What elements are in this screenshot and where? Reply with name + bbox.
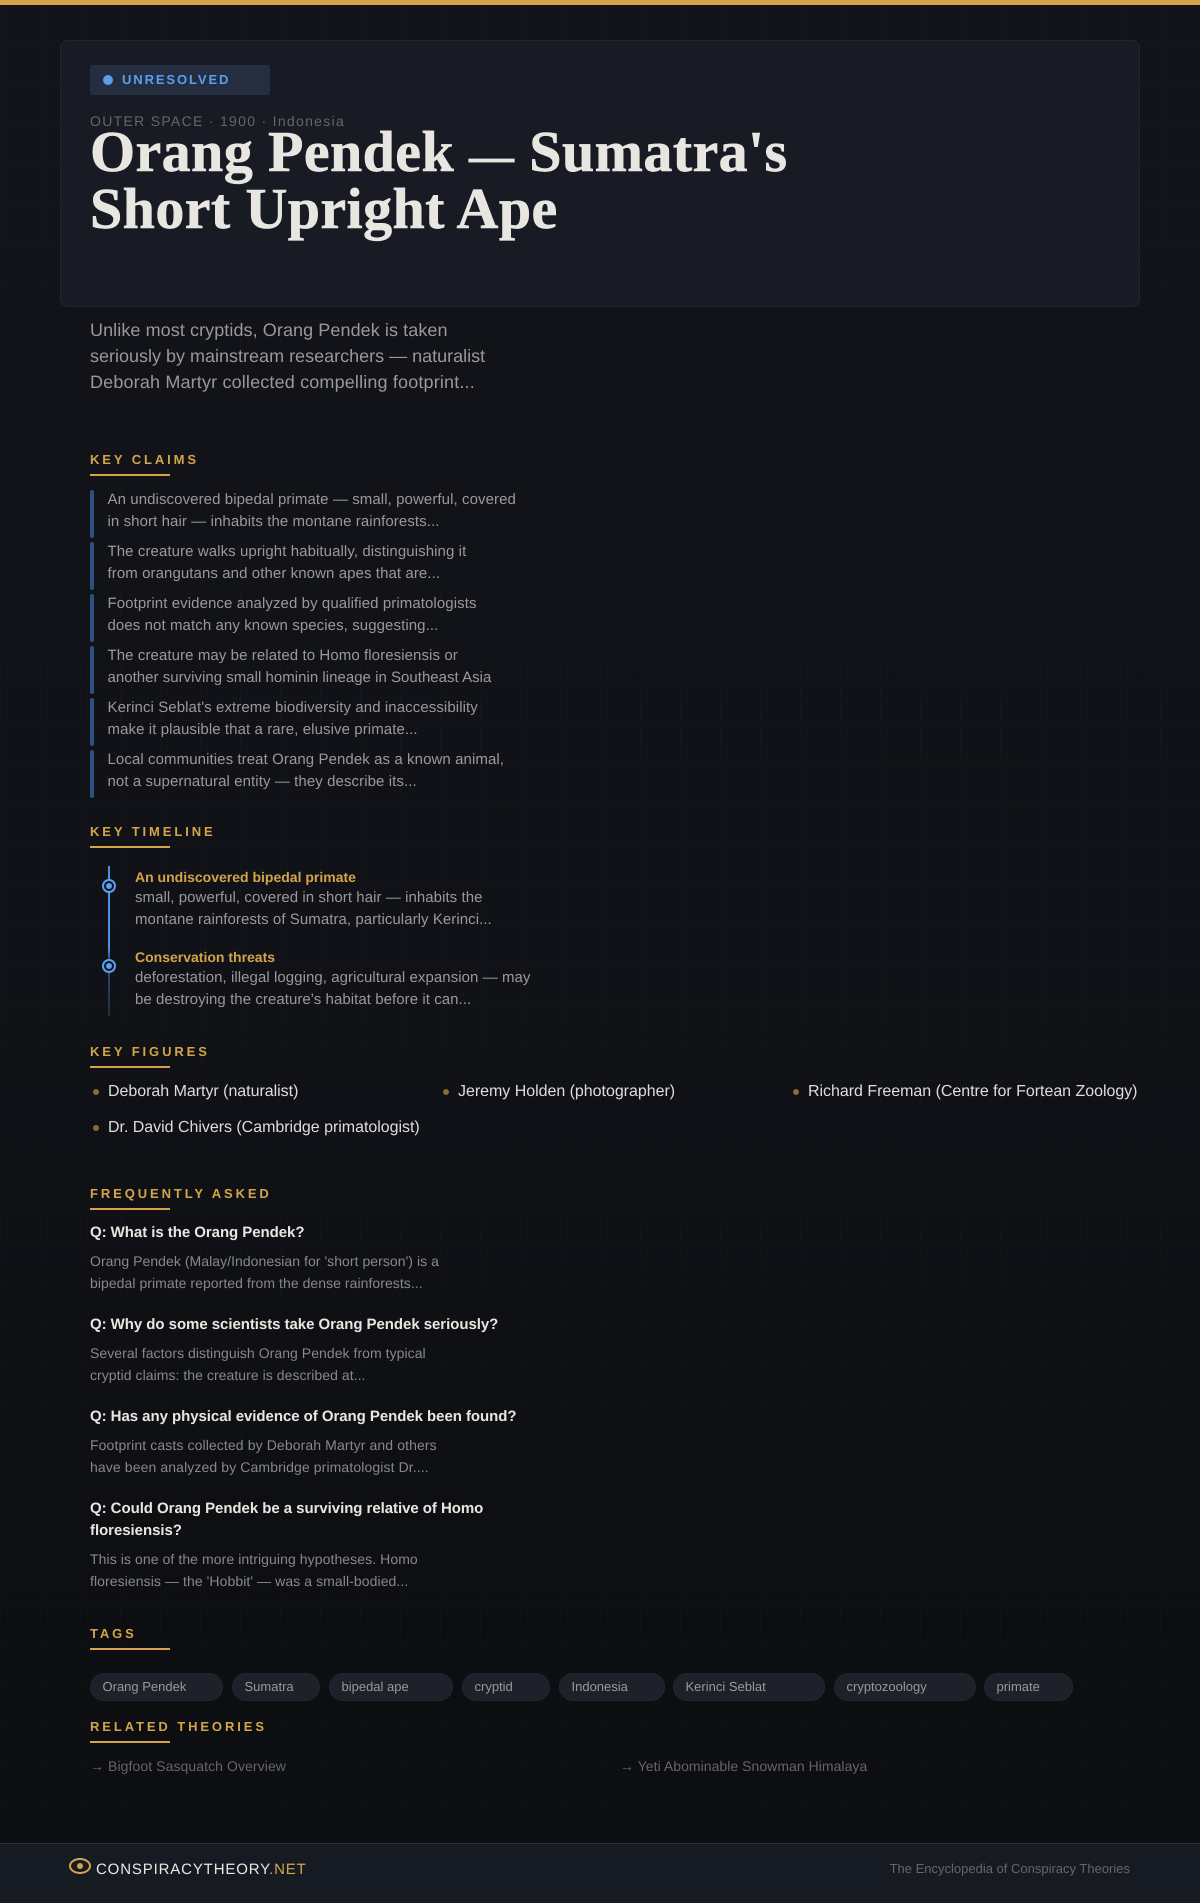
FAQ 4: Q: Could Orang Pendek be a surviving relative of Homo xyxy=(90,1500,483,1517)
FAQ 1: Q: What is the Orang Pendek? xyxy=(90,1224,304,1241)
tag xyxy=(984,1673,1073,1701)
tag xyxy=(329,1673,453,1701)
tag: cryptid xyxy=(474,1679,513,1694)
intro text: seriously by mainstream researchers — naturalist xyxy=(90,346,485,366)
timeline event 2: be destroying the creature's habitat before it can... xyxy=(135,991,471,1008)
footer xyxy=(0,1843,1200,1903)
claim 6 xyxy=(90,750,504,798)
claim 1: An undiscovered bipedal primate — small, powerful, covered xyxy=(108,491,516,508)
footer tagline: The Encyclopedia of Conspiracy Theories xyxy=(890,1861,1130,1876)
related link: Yeti: → Yeti Abominable Snowman Himalaya xyxy=(620,1758,867,1774)
claim 4: another surviving small hominin lineage in Southeast Asia xyxy=(108,669,491,686)
FAQ 3: have been analyzed by Cambridge primatologist Dr.... xyxy=(90,1459,429,1475)
claim 1: in short hair — inhabits the montane rainforests... xyxy=(108,513,440,530)
FAQ 3 xyxy=(90,1408,516,1475)
heading: frequently asked: FREQUENTLY ASKED xyxy=(90,1186,272,1201)
claim 3: does not match any known species, suggesting... xyxy=(108,617,438,634)
logo wordmark: CONSPIRACYTHEORY.NET xyxy=(96,1861,307,1878)
tag: Indonesia xyxy=(572,1679,628,1694)
heading: key figures: KEY FIGURES xyxy=(90,1044,210,1059)
timeline event 1: montane rainforests of Sumatra, particularly Kerinci... xyxy=(135,911,492,928)
tag xyxy=(462,1673,550,1701)
status badge xyxy=(90,65,270,95)
title: Short Upright Ape xyxy=(90,176,558,241)
claim 5: Kerinci Seblat's extreme biodiversity and inaccessibility xyxy=(108,699,478,716)
title xyxy=(90,119,787,242)
timeline node 1 xyxy=(102,879,116,893)
FAQ 3: Footprint casts collected by Deborah Martyr and others xyxy=(90,1437,437,1453)
FAQ 1 xyxy=(90,1224,439,1291)
timeline event 1: small, powerful, covered in short hair — inhabits the xyxy=(135,889,483,906)
tag: bipedal ape xyxy=(342,1679,409,1694)
badge label: UNRESOLVED xyxy=(122,72,230,87)
heading: key timeline: KEY TIMELINE xyxy=(90,824,216,839)
timeline event 1 xyxy=(135,869,492,928)
heading: key claims: KEY CLAIMS xyxy=(90,452,199,467)
timeline event 2 xyxy=(135,949,530,1008)
claim 6: Local communities treat Orang Pendek as a known animal, xyxy=(108,751,504,768)
panel: hero header xyxy=(60,40,1140,307)
claim 5: make it plausible that a rare, elusive primate... xyxy=(108,721,418,738)
icon: eye logo xyxy=(69,1858,91,1874)
panel: key figures xyxy=(93,1083,1137,1136)
figure: Richard Freeman: Richard Freeman (Centre for Fortean Zoology) xyxy=(808,1083,1137,1100)
claim 2: The creature walks upright habitually, distinguishing it xyxy=(108,543,466,560)
FAQ 1: Orang Pendek (Malay/Indonesian for 'short person') is a xyxy=(90,1253,439,1269)
tag xyxy=(232,1673,320,1701)
FAQ 4: This is one of the more intriguing hypotheses. Homo xyxy=(90,1551,418,1567)
timeline node 2 xyxy=(102,959,116,973)
FAQ 2 xyxy=(90,1316,498,1383)
panel: key claims xyxy=(90,490,516,798)
panel: FAQ xyxy=(90,1224,516,1589)
tag: primate xyxy=(996,1679,1040,1694)
timeline event 2: Conservation threats xyxy=(135,949,275,965)
claim 4 xyxy=(90,646,492,694)
figure: Jeremy Holden: Jeremy Holden (photographer) xyxy=(458,1083,675,1100)
tag xyxy=(90,1673,223,1701)
heading: tags: TAGS xyxy=(90,1626,137,1641)
claim 1 xyxy=(90,490,516,538)
tag xyxy=(673,1673,825,1701)
chart: timeline xyxy=(102,866,530,1016)
claim 3: Footprint evidence analyzed by qualified primatologists xyxy=(108,595,477,612)
tags row xyxy=(90,1673,1073,1701)
claim 3 xyxy=(90,594,477,642)
claim 6: not a supernatural entity — they describe its... xyxy=(108,773,417,790)
category line: OUTER SPACE · 1900 · Indonesia xyxy=(90,113,345,129)
tag: Kerinci Seblat xyxy=(686,1679,766,1694)
FAQ 2: cryptid claims: the creature is described at... xyxy=(90,1367,365,1383)
claim 2: from orangutans and other known apes that are... xyxy=(108,565,440,582)
heading: related theories: RELATED THEORIES xyxy=(90,1719,267,1734)
claim 2 xyxy=(90,542,466,590)
tag xyxy=(834,1673,976,1701)
title: Orang Pendek — Sumatra's xyxy=(90,119,787,184)
intro text: Deborah Martyr collected compelling footprint... xyxy=(90,372,475,392)
related link: Bigfoot: → Bigfoot Sasquatch Overview xyxy=(90,1758,286,1774)
intro text: Unlike most cryptids, Orang Pendek is taken xyxy=(90,320,448,340)
top accent bar xyxy=(0,0,1200,5)
claim 4: The creature may be related to Homo floresiensis or xyxy=(108,647,458,664)
timeline axis xyxy=(108,866,110,1016)
figure: Deborah Martyr: Deborah Martyr (naturalist) xyxy=(108,1083,298,1100)
FAQ 3: Q: Has any physical evidence of Orang Pendek been found? xyxy=(90,1408,516,1425)
timeline event 2: deforestation, illegal logging, agricultural expansion — may xyxy=(135,969,530,986)
timeline event 1: An undiscovered bipedal primate xyxy=(135,869,356,885)
figure: David Chivers: Dr. David Chivers (Cambridge primatologist) xyxy=(108,1119,420,1136)
tag: cryptozoology xyxy=(846,1679,927,1694)
FAQ 1: bipedal primate reported from the dense rainforests... xyxy=(90,1275,423,1291)
icon: status dot xyxy=(103,75,113,85)
FAQ 4 xyxy=(90,1500,483,1589)
intro text xyxy=(90,320,485,392)
FAQ 2: Q: Why do some scientists take Orang Pendek seriously? xyxy=(90,1316,498,1333)
claim 5 xyxy=(90,698,478,746)
FAQ 2: Several factors distinguish Orang Pendek from typical xyxy=(90,1345,426,1361)
tag xyxy=(559,1673,665,1701)
tag: Orang Pendek xyxy=(102,1679,186,1694)
tag: Sumatra xyxy=(244,1679,294,1694)
FAQ 4: floresiensis? xyxy=(90,1522,182,1539)
FAQ 4: floresiensis — the 'Hobbit' — was a small-bodied... xyxy=(90,1573,408,1589)
